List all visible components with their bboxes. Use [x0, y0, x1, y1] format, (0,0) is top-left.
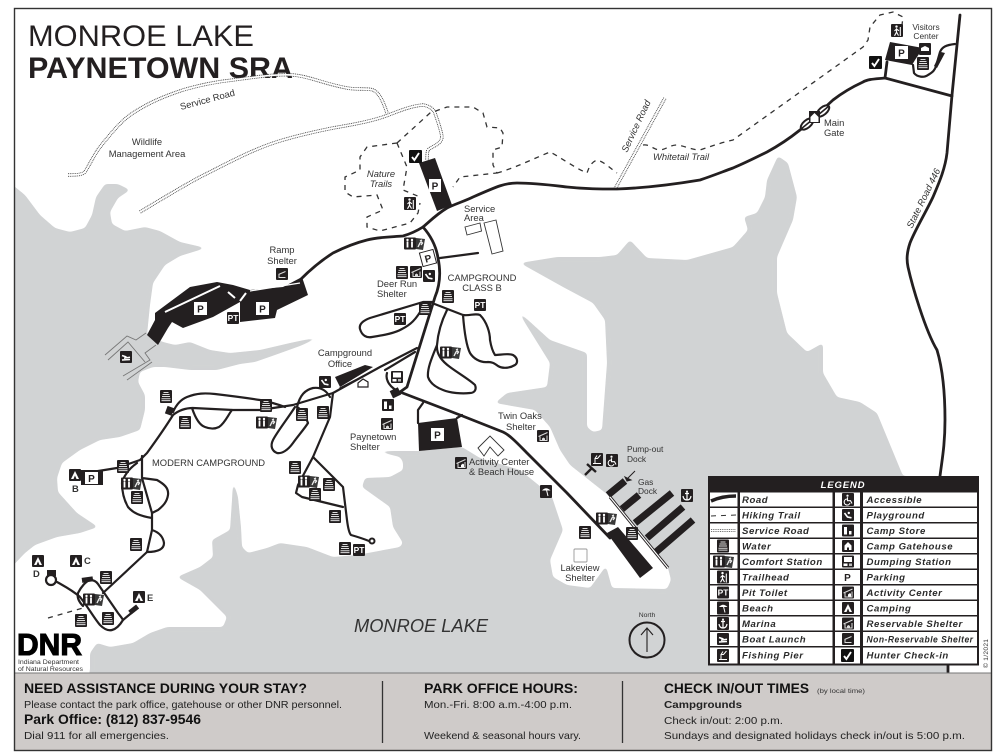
label: gas dock: Dock [638, 486, 658, 496]
footer: check in/out: Campgrounds [664, 700, 742, 711]
footer: check in/out: (by local time) [817, 688, 865, 695]
icon: camping e [133, 591, 145, 603]
legend row 1: Road [742, 495, 769, 506]
icon: water, modern 1 [160, 390, 172, 403]
service area buildings [465, 220, 503, 254]
legend row 3: Service Road [742, 526, 810, 537]
label: gas dock [638, 477, 658, 496]
DNR logo: Indiana Department [18, 659, 79, 666]
icon: camping d [32, 555, 44, 567]
icon: comfort station, modern east [298, 476, 319, 488]
footer: assistance: NEED ASSISTANCE DURING YOUR STAY? [24, 681, 307, 696]
parking sign left: P [197, 304, 204, 316]
parking sign right: P [259, 304, 266, 316]
icon: water, modern 5 [317, 406, 329, 419]
legend row 4 [710, 539, 977, 553]
label: state road 446: State Road 446 [904, 166, 943, 230]
icon: water, south 2 [75, 614, 87, 627]
nature trail parking: P [432, 182, 439, 192]
label: service area: Area [464, 212, 485, 223]
label: ramp shelter: Ramp [269, 244, 295, 255]
footer panel [15, 673, 991, 750]
footer: office hours: Weekend & seasonal hours vary. [424, 731, 581, 742]
icon: comfort station, modern north [256, 416, 277, 429]
label: pump-out dock: Pump-out [627, 444, 664, 454]
label: campsite letters: E [147, 592, 153, 603]
label: deer run shelter: Deer Run [377, 278, 417, 289]
service roads [68, 75, 665, 212]
legend row 10 [710, 632, 977, 646]
label: lakeview shelter: Shelter [565, 572, 595, 583]
icon: parking b: P [88, 474, 95, 485]
label: gas dock: Gas [638, 477, 653, 487]
icon: accessible [606, 454, 618, 467]
icon: parking: P [424, 253, 433, 266]
icon: beach [540, 485, 552, 498]
legend row 9: Marina [742, 619, 776, 630]
icon: water, modern 7 [323, 478, 335, 491]
icon: hunter check-in [409, 150, 422, 163]
legend row 6: Trailhead [742, 572, 790, 584]
label: twin oaks shelter [498, 410, 542, 432]
icon: water, modern 2 [179, 416, 191, 429]
activity center building [478, 436, 504, 456]
label: nature trails: Trails [370, 178, 392, 189]
label: service road: Service Road [179, 87, 236, 112]
label: lakeview shelter [560, 562, 600, 583]
icon: water, deer run [396, 266, 408, 279]
icon: pit toilet, deer run: PT [395, 314, 406, 324]
label: ramp shelter: Shelter [267, 255, 297, 266]
label: nature trails [367, 168, 395, 189]
legend row 1: Accessible [866, 495, 922, 506]
legend row 3 [710, 524, 977, 538]
icon: water, west 2 [131, 491, 143, 504]
roads: campgrounds [57, 253, 517, 630]
north arrow [630, 612, 664, 658]
label: main gate: Gate [824, 127, 844, 138]
footer: check in/out: Check in/out: 2:00 p.m. [664, 716, 783, 727]
label: lakeview shelter: Lakeview [560, 562, 600, 573]
icon: dumping station [391, 371, 403, 383]
footer: check in/out: CHECK IN/OUT TIMES [664, 681, 809, 696]
icon: water, class b [442, 290, 454, 303]
icon: reservable shelter, paynetown [381, 418, 393, 430]
icon: water, modern 6 [289, 461, 301, 474]
footer: assistance: Please contact the park office, gatehouse or other DNR personnel. [24, 700, 342, 711]
icon: water, lakeview [579, 526, 591, 539]
icon: parking b [81, 470, 103, 485]
icon: hunter check-in, visitors [869, 56, 882, 69]
title [28, 20, 293, 85]
label: twin oaks shelter: Shelter [506, 421, 536, 432]
legend row 4: Water [742, 542, 772, 552]
label: campground class b: CAMPGROUND [448, 272, 517, 283]
legend [708, 476, 979, 666]
icon: marina [681, 489, 693, 502]
icon: comfort station, west [121, 478, 142, 490]
legend row 2: Playground [866, 510, 925, 522]
footer: check in/out: Sundays and designated holidays check in/out is 5:00 p.m. [664, 731, 965, 742]
label: campsite letters [33, 483, 153, 603]
footer: office hours [424, 681, 581, 742]
label: deer run shelter: Shelter [377, 288, 407, 299]
parking sign right [256, 302, 269, 316]
label: twin oaks shelter: Twin Oaks [498, 410, 542, 421]
legend row 2 [710, 508, 977, 522]
legend row 6 [710, 570, 977, 584]
marina parking [607, 527, 653, 578]
label: visitors center: Center [913, 31, 939, 41]
icon: water, modern 3 [260, 399, 272, 412]
fishing pier [585, 464, 596, 475]
main gate [799, 103, 831, 132]
label: campground class b: CLASS B [462, 282, 502, 293]
icon: water, south 1 [100, 571, 112, 584]
footer: check in/out [664, 681, 965, 742]
map labels [33, 22, 943, 636]
north arrow: North [639, 612, 656, 619]
icon: comfort station [404, 238, 425, 250]
copyright: © 1/2021 [982, 639, 990, 668]
arrow: pump-out dock [625, 471, 635, 481]
label: wildlife area [109, 136, 186, 159]
legend row 5: Comfort Station [742, 557, 823, 568]
legend row 8 [710, 601, 977, 615]
legend row 6: P [844, 573, 851, 584]
icon: water, class b road [419, 302, 431, 315]
icon: water, modern 10 [339, 542, 351, 555]
footer: office hours: Mon.-Fri. 8:00 a.m.-4:00 p.m. [424, 700, 572, 711]
footer: assistance: Park Office: (812) 837-9546 [24, 712, 201, 727]
legend row 7: PT [718, 588, 729, 598]
parking lot: campground [418, 418, 462, 451]
label: activity center: Activity Center [469, 456, 529, 467]
icon: water, modern 8 [309, 488, 321, 501]
icon: water, visitors [917, 57, 929, 70]
icon: water, south 3 [102, 612, 114, 625]
icon: comfort station, class b [440, 346, 461, 359]
icon: pit toilet, class b: PT [475, 300, 486, 310]
icon: non-reservable shelter, ramp [276, 268, 288, 280]
outer margin [0, 0, 14, 753]
icon: activity center [455, 457, 467, 469]
icon: camping b [69, 469, 81, 481]
label: campground office [318, 347, 372, 369]
label: visitors center [912, 22, 940, 41]
icon: playground, deer run [423, 270, 435, 282]
label: pump-out dock: Dock [627, 454, 647, 464]
marina docks [608, 481, 693, 552]
legend title: LEGEND [821, 480, 865, 491]
legend row 6: Parking [866, 572, 906, 584]
icon: water, west 3 [130, 538, 142, 551]
label: campground office: Office [328, 358, 352, 369]
legend row 1 [710, 492, 977, 506]
label: deer run shelter [377, 278, 417, 299]
nature trail parking [419, 158, 452, 211]
road ends [46, 406, 374, 615]
label: pump-out dock [627, 444, 664, 464]
icon: camping c [70, 555, 82, 567]
icon: fishing pier [591, 453, 603, 466]
label: nature trails: Nature [367, 168, 395, 179]
legend row 10: Non-Reservable Shelter [866, 634, 974, 646]
label: paynetown shelter [350, 431, 396, 452]
legend row 5 [710, 554, 977, 568]
visitors center parking [885, 42, 945, 68]
hiking trails [48, 12, 903, 618]
icon: water, modern 4 [296, 408, 308, 421]
label: service area [464, 203, 495, 223]
legend row 8: Beach [742, 604, 774, 614]
label: service area: Service [464, 203, 495, 214]
icon: water, west 1 [117, 460, 129, 473]
icon: parking [419, 249, 437, 267]
visitors center parking: P [898, 48, 905, 60]
icon: water, marina [626, 527, 638, 540]
label: visitors center: Visitors [912, 22, 940, 32]
road: visitors loop [913, 44, 955, 77]
label: ramp shelter [267, 244, 297, 266]
icon: comfort station, marina [596, 512, 617, 525]
map icons [32, 24, 931, 627]
legend row 11: Hunter Check-in [866, 650, 949, 662]
footer: assistance [24, 681, 342, 742]
label: paynetown shelter: Paynetown [350, 431, 396, 442]
legend row 5: Dumping Station [866, 557, 952, 568]
label: campsite letters: D [33, 568, 40, 579]
label: paynetown shelter: Shelter [350, 441, 380, 452]
label: campsite letters: C [84, 555, 91, 566]
legend row 2: Hiking Trail [742, 510, 801, 522]
icon: reservable shelter, twin oaks [537, 430, 549, 442]
icon: playground, office [319, 376, 331, 388]
title: PAYNETOWN SRA [28, 52, 293, 85]
parking lot: campground: P [434, 430, 441, 442]
label: campsite letters: B [72, 483, 79, 494]
boat launch lines [105, 333, 156, 380]
legend row 4: Camp Gatehouse [866, 542, 953, 552]
dock walkway [610, 497, 668, 568]
label: monroe lake: MONROE LAKE [354, 616, 489, 636]
icon: reservable shelter, deer run [410, 266, 422, 278]
title: MONROE LAKE [28, 20, 254, 53]
label: main gate: Main [824, 117, 844, 128]
label: service road east: Service Road [619, 97, 653, 154]
footer: office hours: PARK OFFICE HOURS: [424, 681, 578, 696]
lake: main body [84, 156, 948, 695]
icon: pit toilet, ramp: PT [228, 313, 239, 323]
legend row 7: Activity Center [866, 588, 943, 599]
lakeview shelter [574, 549, 587, 562]
road: state road 446 [907, 15, 960, 672]
icon: comfort station, south [83, 594, 104, 606]
icon: trailhead [404, 197, 416, 210]
label: campground office: Campground [318, 347, 372, 358]
legend row 3: Camp Store [866, 526, 926, 537]
label: modern campground: MODERN CAMPGROUND [152, 457, 265, 468]
legend row 11: Fishing Pier [742, 650, 804, 662]
icon: store, visitors [919, 43, 931, 55]
label: wildlife area: Wildlife [132, 136, 162, 147]
legend row 8: Camping [866, 604, 911, 614]
lake: west arm [4, 178, 323, 575]
label: whitetail trail: Whitetail Trail [653, 151, 710, 162]
legend row 9: Reservable Shelter [866, 619, 964, 630]
icon: pit toilet, modern: PT [354, 545, 365, 555]
icon: water, modern 9 [329, 510, 341, 523]
legend row 11 [710, 648, 977, 664]
label: wildlife area: Management Area [109, 148, 186, 159]
footer: assistance: Dial 911 for all emergencies. [24, 731, 169, 742]
icon: camp store [382, 399, 394, 411]
icon: trailhead, visitors [891, 24, 903, 37]
legend row 7 [710, 586, 977, 600]
label: main gate [824, 117, 844, 138]
DNR logo: of Natural Resources [18, 666, 84, 673]
parking sign left [194, 302, 207, 316]
label: activity center [469, 456, 534, 477]
legend row 9 [710, 616, 977, 630]
legend row 7: Pit Toilet [742, 588, 788, 599]
label: activity center: & Beach House [469, 466, 534, 477]
icon: boat launch [120, 351, 132, 363]
label: campground class b [448, 272, 517, 293]
legend row 10: Boat Launch [742, 634, 806, 646]
ramp parking area [147, 277, 308, 345]
campground office buildings [335, 365, 401, 398]
DNR logo: DNR [17, 627, 82, 662]
road: main park road [300, 62, 952, 538]
